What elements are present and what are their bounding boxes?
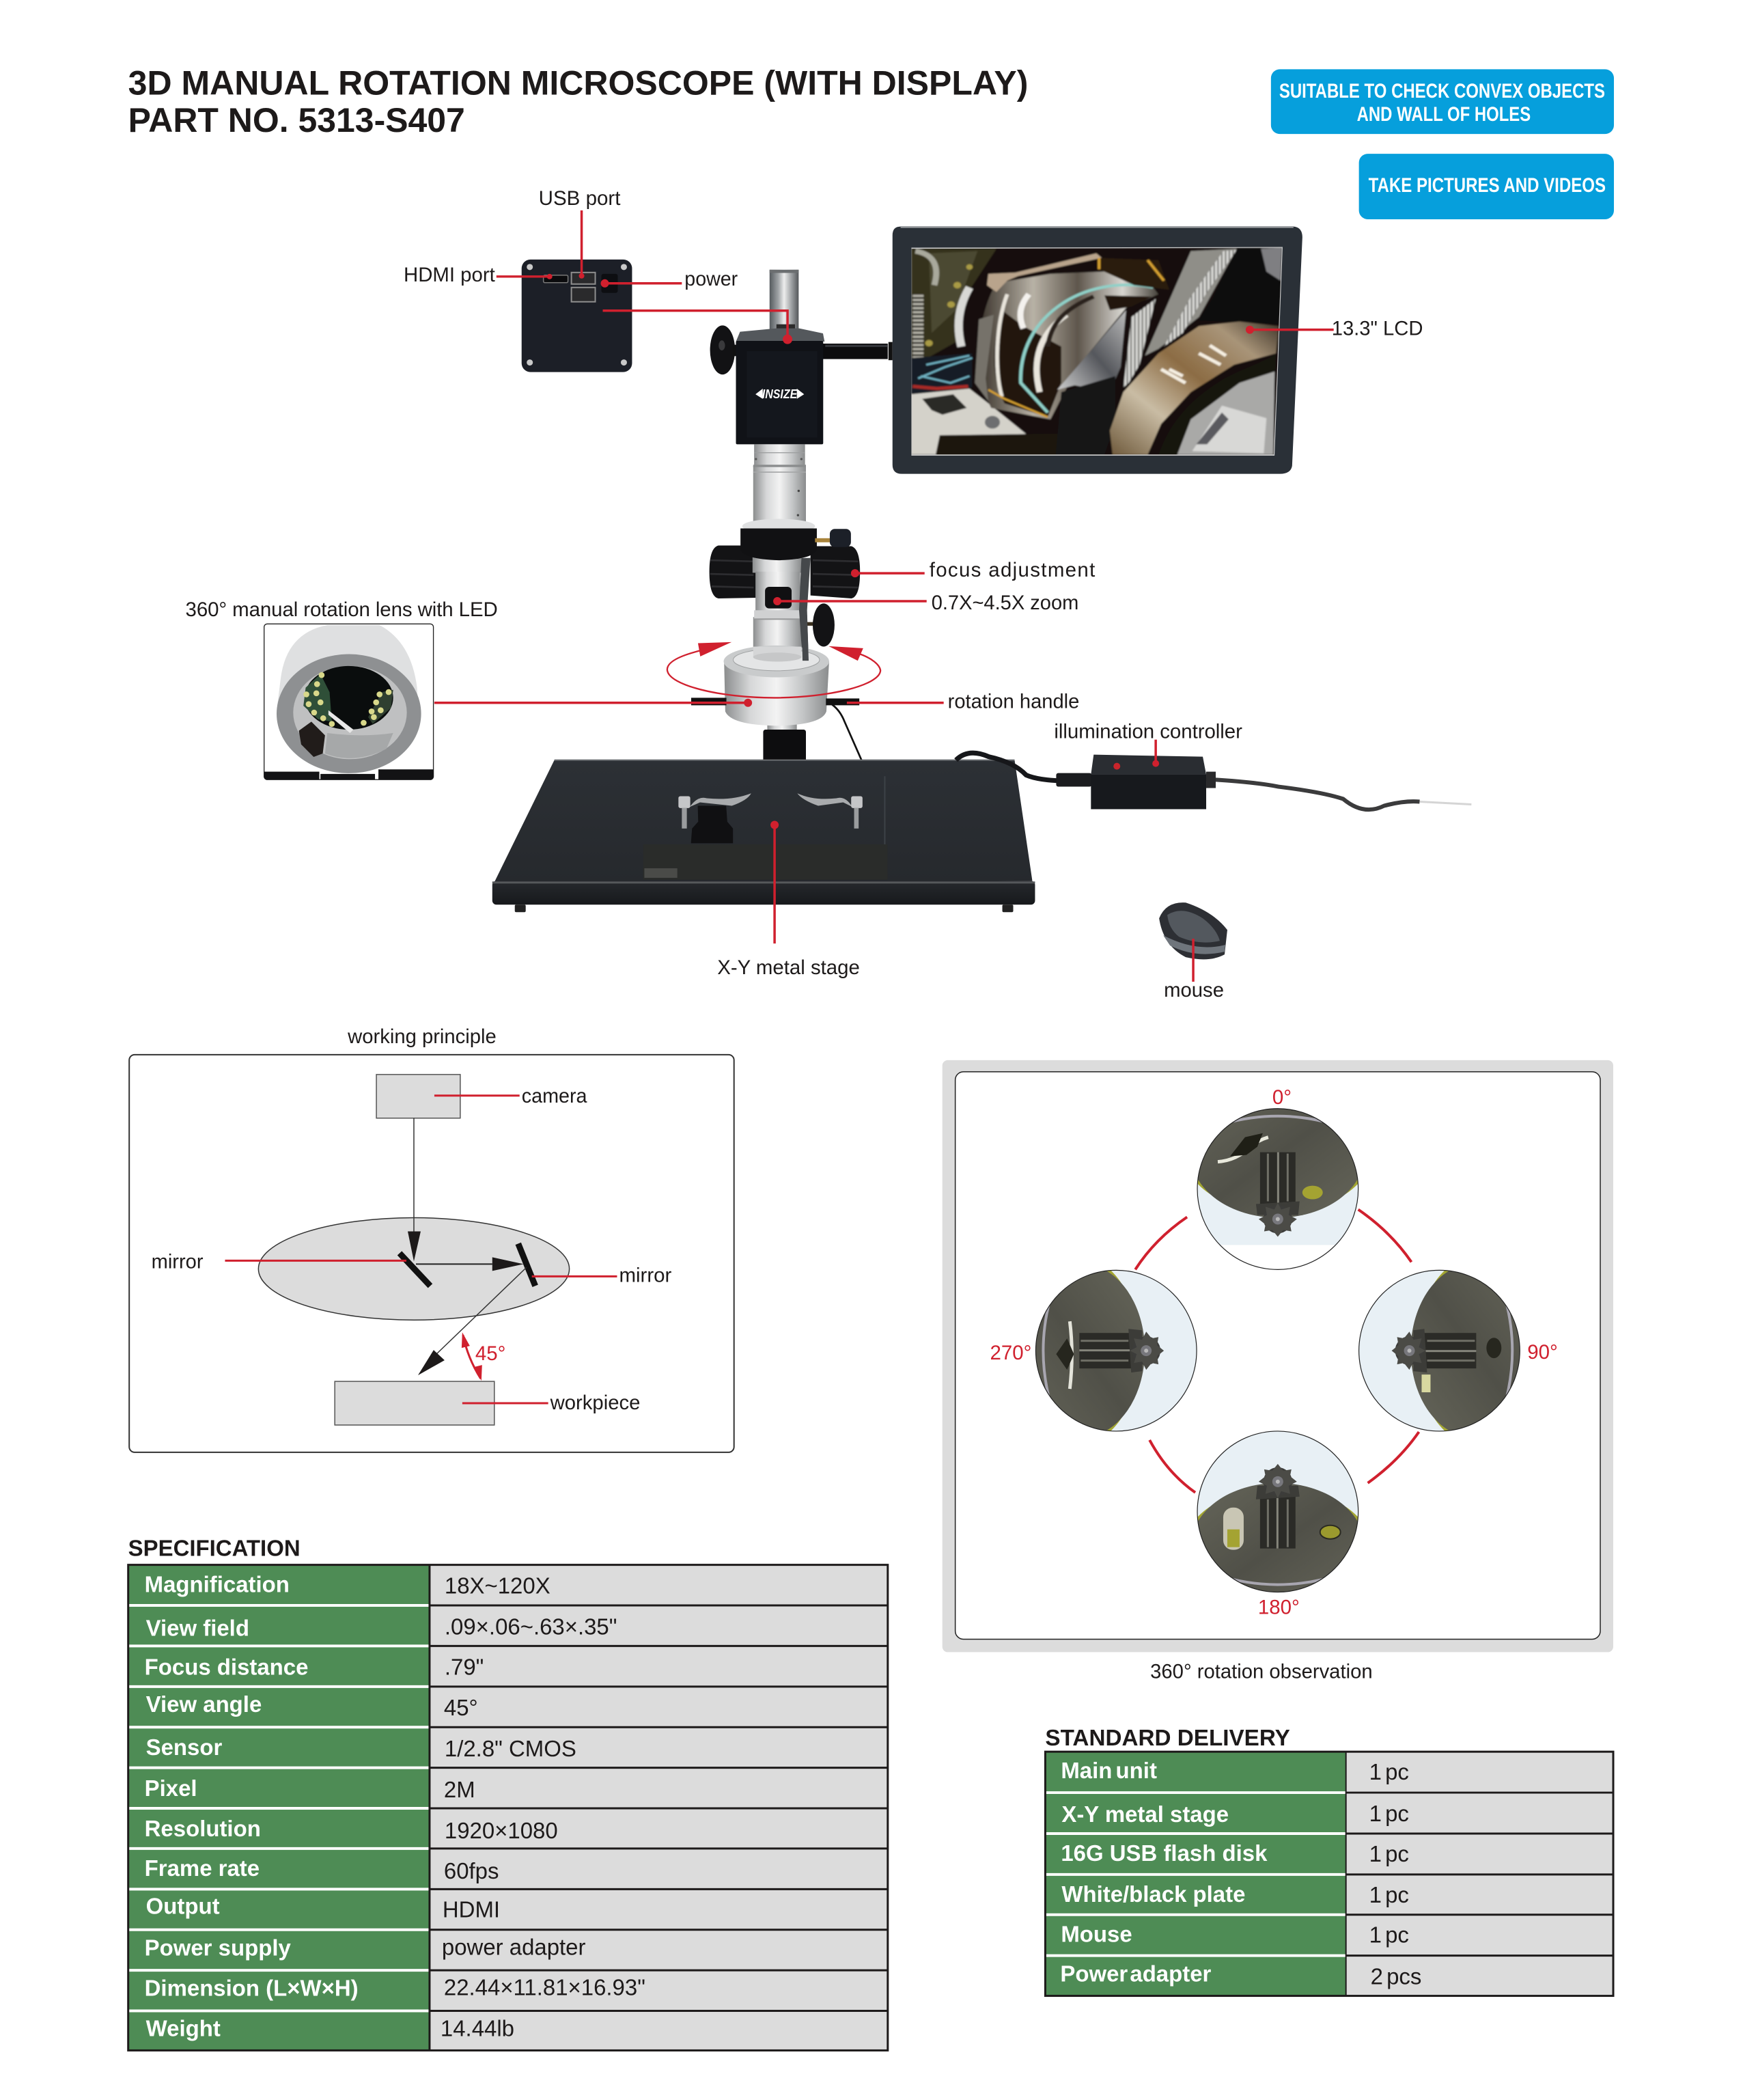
view: 90 degrees [1358,1269,1520,1432]
table: standard delivery [1045,1752,1613,1996]
row labels: Weight [146,2015,221,2041]
delivery values: 2 pcs [1371,1964,1421,1989]
heading: standard delivery: STANDARD DELIVERY [1045,1725,1290,1750]
second mirror: mirror [619,1264,672,1286]
callout labels: 13.3" LCD [1332,318,1423,340]
camera box: camera [522,1085,587,1107]
beam from camera [408,1118,421,1261]
row values: 1920×1080 [445,1818,558,1843]
illustration: X-Y metal stage [492,760,1035,912]
callout labels: X-Y metal stage [717,956,860,979]
callout labels: focus adjustment [930,559,1095,581]
row values: 22.44×11.81×16.93" [444,1975,645,2000]
title: PART NO. 5313-S407 [128,101,465,139]
row labels: View angle [146,1691,262,1717]
illustration: mouse [1159,902,1227,959]
view: 180 degrees [1197,1431,1359,1593]
row labels: Output [146,1894,220,1919]
angle labels: 180° [1258,1597,1300,1619]
delivery labels: 16G USB flash disk [1061,1840,1268,1866]
panel: working principle diagram [129,1055,734,1452]
caption: 360 rotation observation: 360° rotation observation [1150,1660,1373,1683]
callout labels: 0.7X~4.5X zoom [932,592,1078,614]
row values: 60fps [444,1858,499,1883]
delivery labels: X-Y metal stage [1061,1801,1229,1827]
badge: suitable to check convex objects [1271,69,1614,134]
row labels: Magnification [145,1572,290,1597]
callout labels: illumination controller [1054,721,1242,743]
callout labels: 360° manual rotation lens with LED [186,598,498,621]
rotation arrow [667,642,880,697]
callout labels: power [684,268,738,290]
row values [441,1573,645,2041]
angle labels [990,1086,1558,1619]
delivery labels: Power adapter [1060,1961,1212,1987]
badge: suitable to check convex objects: SUITABLE TO CHECK CONVEX OBJECTS [1279,80,1605,102]
row values: 2M [444,1777,475,1802]
illustration: LCD display [889,227,1302,474]
callout labels [186,187,1423,1001]
row values: .09×.06~.63×.35" [445,1614,617,1639]
badge: suitable to check convex objects: AND WALL OF HOLES [1357,103,1531,126]
row values: power adapter [442,1935,586,1960]
table: specification [128,1565,888,2050]
delivery values [1369,1759,1421,1989]
delivery values: 1 pc [1369,1922,1409,1948]
callout lines [434,210,1334,982]
illustration: 360 manual rotation lens photo [264,624,434,780]
title: 3D MANUAL ROTATION MICROSCOPE (WITH DISPLAY) [128,64,1028,102]
row labels: Power supply [145,1935,291,1961]
title [128,64,1028,139]
angle labels: 270° [990,1342,1031,1364]
view: 0 degrees [1197,1108,1359,1270]
callout labels: mouse [1164,979,1224,1001]
row values: 1/2.8" CMOS [445,1736,576,1761]
row values: 18X~120X [445,1573,550,1599]
badge: take pictures and videos: TAKE PICTURES AND VIDEOS [1369,174,1606,197]
row labels: Dimension (L×W×H) [145,1976,359,2001]
angle labels: 0° [1272,1086,1292,1109]
beam between mirrors [416,1257,524,1271]
rotation arcs [1135,1210,1419,1493]
delivery labels: Main unit [1061,1758,1157,1783]
angle labels: 90° [1527,1341,1558,1364]
callout labels: rotation handle [948,691,1079,713]
row labels: Pixel [145,1776,197,1801]
angle marker 45 degrees: 45° [475,1342,505,1365]
callout labels: HDMI port [404,264,495,286]
row labels: Sensor [146,1735,222,1760]
badge: take pictures and videos [1359,154,1614,219]
row values: 14.44lb [441,2015,514,2041]
illustration: illumination controller and cable [956,753,1471,810]
delivery values: 1 pc [1369,1841,1409,1866]
delivery labels: Mouse [1061,1922,1132,1947]
icon: camera interface box [522,260,632,372]
row labels: Resolution [145,1816,261,1841]
heading: specification: SPECIFICATION [128,1536,301,1561]
angle marker 45 degrees [462,1332,505,1381]
row labels [145,1572,359,2041]
mirror housing ellipse [258,1217,570,1320]
row labels: Frame rate [145,1855,260,1881]
view: 270 degrees [1035,1269,1197,1432]
second mirror [518,1243,672,1286]
delivery labels [1060,1758,1268,1987]
camera box [376,1075,587,1118]
row labels: Focus distance [145,1654,308,1679]
delivery values: 1 pc [1369,1882,1409,1907]
row values: 45° [444,1695,478,1720]
row labels: View field [146,1615,249,1640]
illustration: microscope head and lens barrel [710,270,888,524]
delivery values: 1 pc [1369,1759,1409,1784]
illustration: focus knobs, zoom ring and rotation lens [691,519,862,773]
illustration: microscope head and lens barrel: INSIZE [762,387,798,401]
beam to workpiece [418,1267,527,1375]
callout labels: USB port [539,187,620,210]
delivery labels: White/black plate [1061,1881,1245,1907]
heading: working principle: working principle [347,1025,497,1048]
panel: 360 rotation observation [943,1060,1613,1652]
row values: HDMI [443,1897,500,1922]
first mirror: mirror [152,1250,204,1273]
first mirror [152,1250,430,1286]
delivery values: 1 pc [1369,1801,1409,1826]
workpiece box: workpiece [550,1392,640,1414]
workpiece box [335,1381,640,1425]
row values: .79" [445,1654,484,1679]
